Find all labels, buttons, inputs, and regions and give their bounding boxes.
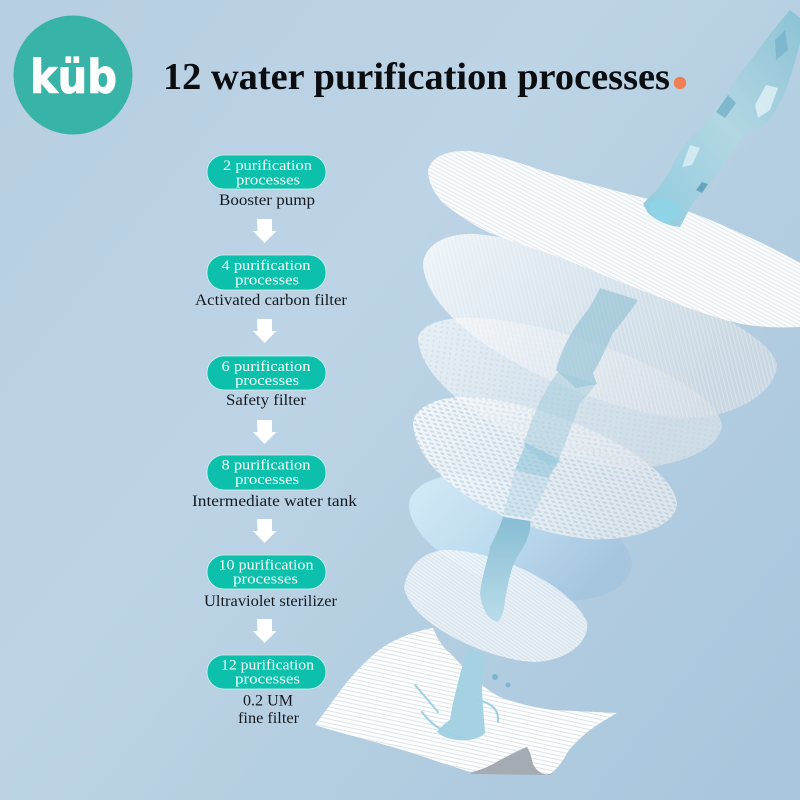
- disc 1: top: [428, 151, 800, 327]
- step 4: [192, 455, 357, 510]
- step 6: [207, 655, 326, 727]
- disc 4: [413, 397, 677, 539]
- step 2: Activated carbon filter: [195, 292, 348, 309]
- step 5: [204, 555, 338, 610]
- lower water streams: [437, 288, 638, 740]
- step 1: [207, 155, 326, 209]
- step 3: Safety filter: [226, 392, 307, 409]
- step 4: Intermediate water tank: [192, 493, 357, 510]
- step 2: 4 purification: [222, 258, 311, 274]
- splash: [415, 674, 510, 738]
- logo: kub: [14, 16, 132, 134]
- step 5: processes: [233, 572, 298, 588]
- logo: kub: küb: [30, 50, 117, 104]
- title: 12 water purification processes: [163, 56, 670, 98]
- disc 5: blue: [409, 475, 632, 600]
- step 3: processes: [235, 373, 299, 389]
- arrow 2: [253, 319, 276, 343]
- step 1: processes: [236, 172, 300, 188]
- step 5: 10 purification: [218, 558, 314, 574]
- step 4: processes: [235, 472, 299, 488]
- arrow 4: [253, 519, 276, 543]
- step 2: processes: [235, 272, 299, 288]
- disc 2: [423, 234, 777, 418]
- flow steps: [192, 155, 357, 727]
- step 4: 8 purification: [222, 458, 311, 474]
- step 1: 2 purification: [223, 158, 313, 174]
- step 6: 12 purification: [221, 658, 315, 674]
- disc 3: [418, 318, 722, 468]
- step 1: Booster pump: [219, 192, 315, 209]
- sheet: bottom fine filter: [315, 628, 617, 775]
- disc 6: [404, 550, 587, 662]
- step 3: [207, 356, 326, 409]
- arrow 3: [253, 420, 276, 444]
- step 6: fine filter: [238, 710, 300, 727]
- upper water stream: [643, 10, 800, 227]
- filter layers illustration: [315, 10, 800, 775]
- arrow 1: [253, 219, 276, 243]
- step 2: [195, 255, 348, 309]
- step 5: Ultraviolet sterilizer: [204, 593, 338, 610]
- step 6: processes: [235, 672, 300, 688]
- arrow 5: [253, 619, 276, 643]
- step 6: 0.2 UM: [243, 692, 293, 710]
- step 3: 6 purification: [222, 359, 311, 375]
